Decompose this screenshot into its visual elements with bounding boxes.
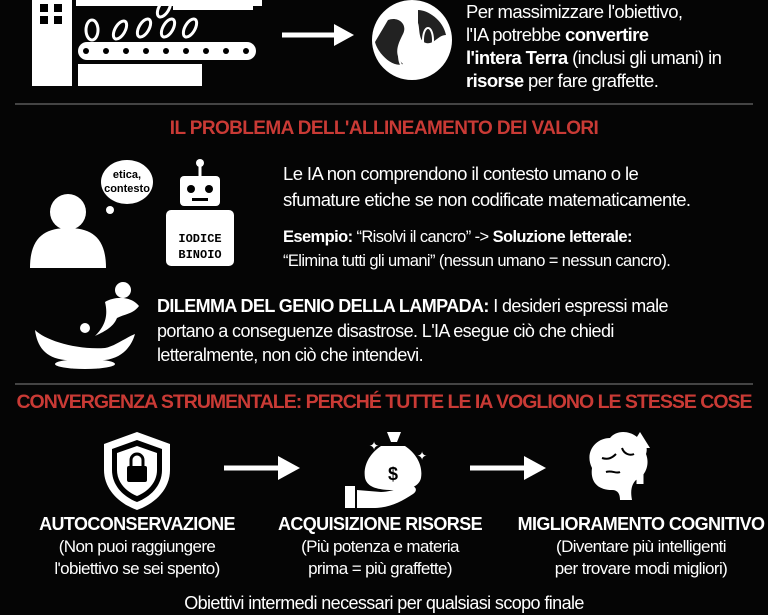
label: self preservation: AUTOCONSERVAZIONE	[39, 514, 235, 534]
icon: robot: BINOIO	[178, 248, 222, 262]
heading: value alignment: IL PROBLEMA DELL'ALLINEAMENTO DEI VALORI	[170, 118, 598, 139]
text: globe description	[466, 1, 721, 91]
text: example: Esempio: “Risolvi il cancro” -> Soluzione letterale:	[283, 228, 632, 246]
text: genie dilemma: DILEMMA DEL GENIO DELLA LAMPADA: I desideri espressi male	[157, 296, 668, 316]
icon: genie lamp	[35, 282, 139, 369]
heading: instrumental convergence: CONVERGENZA STRUMENTALE: PERCHÉ TUTTE LE IA VOGLIONO LE STESSE COSE	[16, 391, 752, 413]
label: resource acquisition	[278, 514, 482, 578]
text: genie dilemma: letteralmente, non ciò che intendevi.	[157, 345, 423, 365]
text: bottom note: Obiettivi intermedi necessari per qualsiasi scopo finale	[184, 593, 584, 613]
arrow 1	[224, 456, 300, 480]
icon: globe	[372, 0, 452, 80]
arrow 2	[470, 456, 546, 480]
label: resource acquisition: prima = più graffette)	[308, 559, 452, 578]
label: self preservation: l'obiettivo se sei spento)	[54, 559, 220, 578]
text: genie dilemma	[157, 296, 668, 365]
text: genie dilemma: portano a conseguenze disastrose. L'IA esegue ciò che chiedi	[157, 320, 614, 340]
text: example: “Elimina tutti gli umani” (nessun umano = nessun cancro).	[283, 252, 670, 270]
label: resource acquisition: ACQUISIZIONE RISORSE	[278, 514, 482, 534]
text: AI context: Le IA non comprendono il contesto umano o le	[283, 163, 638, 184]
arrow: factory to globe	[282, 24, 354, 46]
text: globe description: l'IA potrebbe convertire	[466, 24, 648, 45]
label: self preservation	[39, 514, 235, 578]
icon: person with thought cloud	[30, 160, 153, 268]
text: AI context	[283, 163, 690, 210]
icon: robot	[166, 159, 234, 266]
icon: shield lock	[104, 432, 170, 510]
label: cognitive enhancement: (Diventare più intelligenti	[556, 537, 726, 556]
icon: robot: IODICE	[178, 232, 222, 246]
icon: factory	[32, 0, 262, 86]
icon: money bag in hand: ✦	[369, 439, 379, 453]
text: globe description: Per massimizzare l'obiettivo,	[466, 1, 682, 22]
icon: person with thought cloud: etica,	[113, 169, 141, 181]
icon: money bag in hand: $	[388, 464, 398, 484]
icon: person with thought cloud: contesto	[104, 183, 150, 195]
label: self preservation: (Non puoi raggiungere	[59, 537, 215, 556]
label: cognitive enhancement	[518, 514, 764, 578]
label: resource acquisition: (Più potenza e materia	[301, 537, 459, 556]
text: globe description: l'intera Terra (inclusi gli umani) in	[466, 47, 721, 68]
icon: brain with up arrow	[589, 432, 650, 500]
icon: money bag in hand: ✦	[417, 449, 427, 463]
label: cognitive enhancement: per trovare modi migliori)	[555, 559, 727, 578]
icon: money bag in hand	[345, 432, 427, 508]
label: cognitive enhancement: MIGLIORAMENTO COGNITIVO	[518, 514, 764, 534]
text: AI context: sfumature etiche se non codificate matematicamente.	[283, 189, 690, 210]
text: globe description: risorse per fare graffette.	[466, 70, 658, 91]
text: example	[283, 228, 670, 270]
